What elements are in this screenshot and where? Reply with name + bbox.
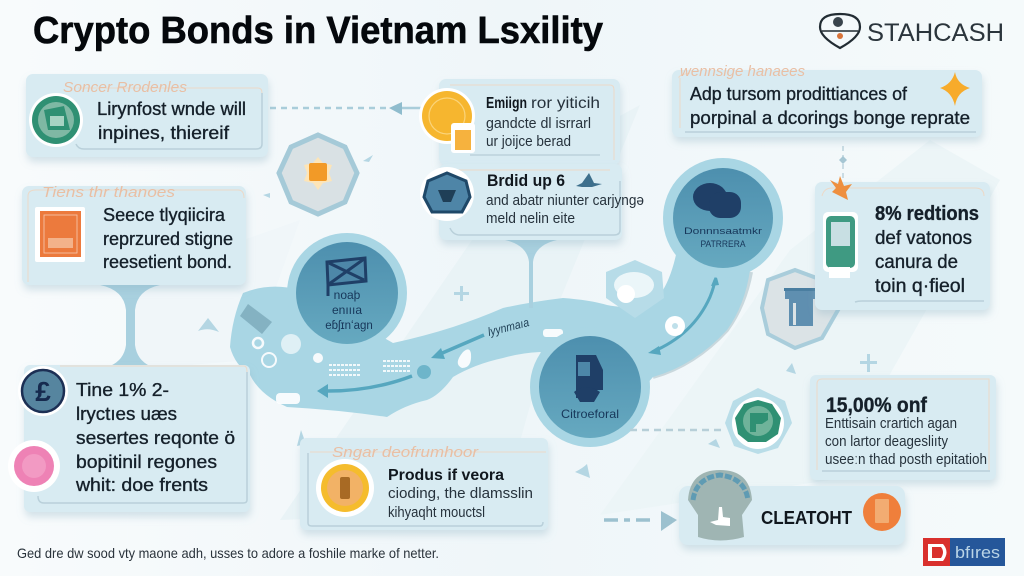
panel: statistics left: Tine 1% 2- [76,380,169,400]
panel: 15,00% statistics [810,375,996,480]
arrow: dashed to callout [604,511,677,531]
panel: statistics left: lryctıes uæs [76,404,177,424]
panel: soncer rrodenles [26,74,268,157]
ribbon small white icons [240,304,563,404]
panel: brdid up 6: and abatr niunter carjyngə [486,192,644,209]
panel: emiign: ur joijce berad [486,133,571,150]
panel: right statistics: canura de [875,252,958,273]
badge: bottom right logo [923,538,1005,566]
hexagon: building [762,270,838,348]
icon: linked chat bubbles [693,183,741,218]
panel: emiign: gandcte dl isrrarl [486,115,591,132]
panel: emiign: Emiign [486,95,527,112]
connector: funnel stem center [505,240,557,308]
node: lower center circle: Citroeforal [561,407,619,421]
panel: right statistics [815,176,990,310]
panel: soncer rrodenles: Lirynfost wnde will [97,99,246,119]
logo: STA+CASH: STAHCASH [867,19,1004,47]
node: upper left circle: eɓʃɪnʻagn [325,320,373,332]
connector: dashed arrow to top center panel [270,102,422,115]
node: upper right circle: Donnnsaatmkr [684,226,762,236]
icon: pound coin: £ [35,376,51,407]
panel: top right: porpinal a dcorings bonge reprate [690,108,970,128]
panel: soncer rrodenles: inpines, thiereif [98,123,230,143]
panel: right statistics: toin q·fieol [875,276,965,297]
icon: blue badge [420,167,474,221]
callout: cleatoht [679,470,905,545]
arrow: ribbon lower left [317,365,431,398]
panel: statistics left [8,365,250,512]
panel label: Soncer Rrodenles [63,79,188,96]
panel label: wennsige hanaees [680,63,805,80]
callout: cleatoht: CLEATOHT [761,508,852,528]
arrow: ribbon middle [431,335,484,359]
gear icon [665,316,685,336]
panel: sngar deofrumhoor: cioding, the dlamsslin [388,485,533,502]
footer note: Ged dre dw sood vty maone adh, usses to adore a foshile marke of netter. [17,545,439,561]
panel: tiens thr thanoes: Seece tlyqiicira [103,205,226,225]
icon: green seal [29,93,83,147]
icon: small figure [576,173,602,187]
panel: sngar deofrumhoor: kihyaqht mouctsl [388,504,485,521]
badge: bottom right logo: bfıres [955,543,1000,562]
icon: gold coin [316,459,374,517]
panel: statistics left: whit: doe frents [75,475,208,495]
panel: tiens thr thanoes: reprzured stigne [103,229,233,249]
icon: machine [574,355,603,402]
panel: statistics left: sesertes reqonte ö [76,428,235,448]
icon: gray fan [688,470,752,540]
icon: envelope flag [327,258,366,296]
panel: sngar deofrumhoor: Produs if veora [388,467,504,484]
icon: green device [823,212,858,278]
icon: orange sun with glass [419,88,475,153]
icon: orange leaf [830,176,852,200]
icon: pink seal [8,440,60,492]
panel: top right: Adp tursom prodittiances of [690,84,908,104]
flow ribbon [230,250,751,417]
panel: tiens thr thanoes [22,184,246,285]
small plus and bird marks [198,155,877,478]
panel label: Sngar deofrumhoor [332,444,479,461]
panel: tiens thr thanoes: reesetient bond. [103,252,232,272]
panel: right statistics: 8% redtions [875,203,979,225]
icon: orange certificate [35,207,85,262]
connector: dashed to green seal [630,429,722,431]
panel label: Tiens thr thanoes [42,184,176,201]
panel: 15,00% statistics: useeːn thad posth epitatioh [825,451,987,468]
hexagon: orange sun [279,135,357,214]
node: upper right circle: PATRRERA [700,239,746,249]
logo: STA+CASH [820,14,1004,48]
panel: 15,00% statistics: Enttisain crartich agan [825,415,957,432]
panel: brdid up 6: Brdid up 6 [487,171,565,190]
ribbon label: lyynmaıa [486,315,531,339]
panel: statistics left: bopitinil regones [76,452,217,472]
panel: top right [672,63,982,137]
panel: brdid up 6 [420,164,644,240]
connector: vertical dashed [839,146,847,180]
arrow: ribbon right [648,274,719,355]
node: upper left circle [287,233,407,353]
panel: brdid up 6: meld nelin eite [486,210,575,227]
panel: right statistics: def vatonos [875,228,972,249]
panel: emiign: ror yiticih [531,95,600,112]
icon: orange star [940,72,970,106]
node: upper left circle: noaþ [334,288,361,302]
panel: 15,00% statistics: con lartor deagesliıty [825,433,948,450]
node: upper right circle [663,158,783,278]
hexagon: green seal [725,388,792,454]
hexagon: white emblem [606,260,664,318]
node: lower center circle [530,327,650,447]
connector: funnel stem left [100,285,160,366]
icon: orange badge [863,493,901,531]
node: upper left circle: enıııa [332,303,362,317]
panel: sngar deofrumhoor [300,438,548,530]
title: Crypto Bonds in Vietnam Lsxility [33,10,603,52]
panel: emiign [419,79,620,165]
icon: pound coin [18,366,68,416]
panel: 15,00% statistics: 15,00% onf [826,394,928,417]
